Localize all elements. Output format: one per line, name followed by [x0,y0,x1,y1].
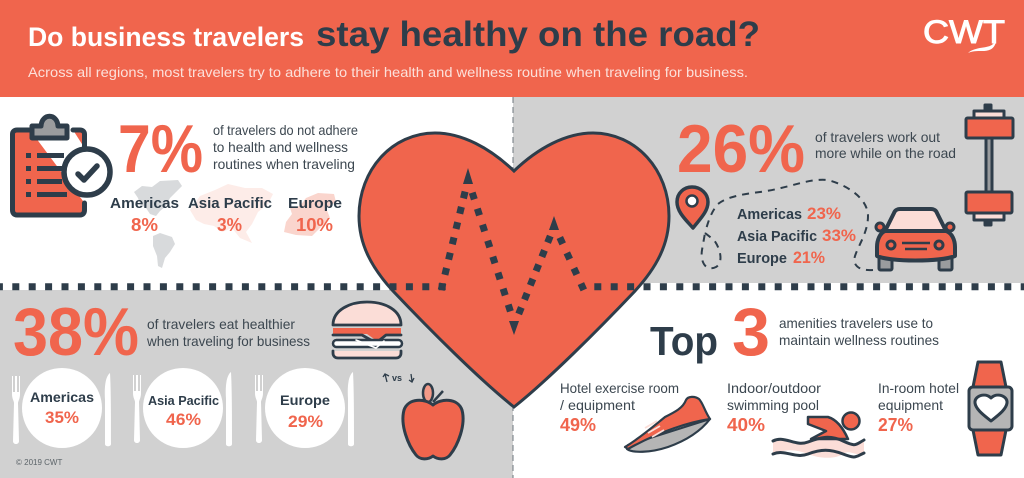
amenity: in-room hotel equipment: 27% [878,415,913,435]
description [146,316,310,349]
description: when traveling for business [146,333,310,349]
plate: Europe: 29% [288,412,323,431]
regional stats: 21% [793,248,825,267]
amenity: in-room hotel equipment [878,380,959,435]
icon: clipboard with check [12,116,110,215]
description: maintain wellness routines [779,332,939,348]
description [213,122,358,172]
vs arrows: vs [392,373,402,383]
ECG dashed line [0,192,1024,314]
icon: smartwatch [969,362,1012,455]
amenity: swimming pool [727,380,821,435]
regional stats [737,204,856,267]
subtitle: Across all regions, most travelers try to adhere to their health and wellness routine when traveling for business. [28,64,748,80]
heart with ECG line [0,133,1024,407]
panel: 7% do not adhere [12,111,358,268]
description: routines when traveling [213,156,355,172]
plate: Asia Pacific: 46% [166,410,201,429]
description [815,129,956,161]
regional stats [110,195,342,235]
copyright: © 2019 CWT [16,458,62,467]
world map [134,180,336,268]
icon: dashed route [702,180,873,270]
title: stay healthy on the road? [316,15,760,54]
description [779,315,939,348]
heading: Top 3 [650,294,770,370]
amenity: hotel exercise room: Hotel exercise room [560,380,679,396]
description: more while on the road [815,145,956,161]
regional stats: Europe [288,195,342,212]
big number 26%: 26% [677,111,805,187]
regional stats: 3% [217,215,242,235]
regional stats: Americas [110,195,179,212]
amenity: hotel exercise room [560,380,679,435]
regional stats: Europe [737,250,787,267]
panel: 38% eat healthier [12,294,463,467]
icon: running shoe [625,397,710,452]
description: of travelers eat healthier [147,316,295,332]
plate: Europe [255,368,354,448]
big number 38%: 38% [13,294,139,370]
regional stats: 8% [131,215,158,235]
regional stats: Asia Pacific [188,195,272,212]
heading: Top 3: Top [650,318,718,364]
amenity: swimming pool: Indoor/outdoor [727,380,821,396]
icon: car [876,209,955,270]
plate: Asia Pacific: Asia Pacific [148,393,219,408]
heart shape [359,133,669,407]
amenity: in-room hotel equipment: In-room hotel [878,380,959,396]
big number 7%: 7% [118,111,203,187]
icon: map pin [677,187,708,228]
amenity: swimming pool: swimming pool [727,397,819,413]
regional stats: 10% [296,215,333,235]
title [28,15,760,54]
description: of travelers do not adhere [213,122,358,138]
icon: apple [403,384,463,459]
regional stats: 33% [822,226,856,245]
regional stats: Americas [737,206,802,223]
regional stats: 23% [807,204,841,223]
amenity: swimming pool: 40% [727,415,765,435]
plate: Europe: Europe [280,392,330,408]
amenity: in-room hotel equipment: equipment [878,397,943,413]
icon: barbell [966,105,1013,225]
panel: top 3 amenities [560,294,1012,458]
title: Do business travelers [28,22,304,52]
header banner [0,0,1024,97]
amenity: hotel exercise room: 49% [560,415,596,435]
description: to health and wellness [213,139,348,155]
regional stats: Asia Pacific [737,228,817,245]
plate: Americas: 35% [45,408,79,427]
amenity: hotel exercise room: / equipment [560,397,635,413]
description: amenities travelers use to [779,315,933,331]
icon: swimmer [773,412,864,458]
panel: 26% work out [677,105,1013,270]
plate: Americas: Americas [30,389,94,405]
heading: Top 3: 3 [732,294,770,370]
logo: CWT: CWT [923,14,1005,50]
plate: Americas [12,368,111,448]
icon: burger [333,302,402,358]
description: of travelers work out [815,129,940,145]
plate: Asia Pacific [133,368,232,448]
vs arrows [383,373,414,383]
